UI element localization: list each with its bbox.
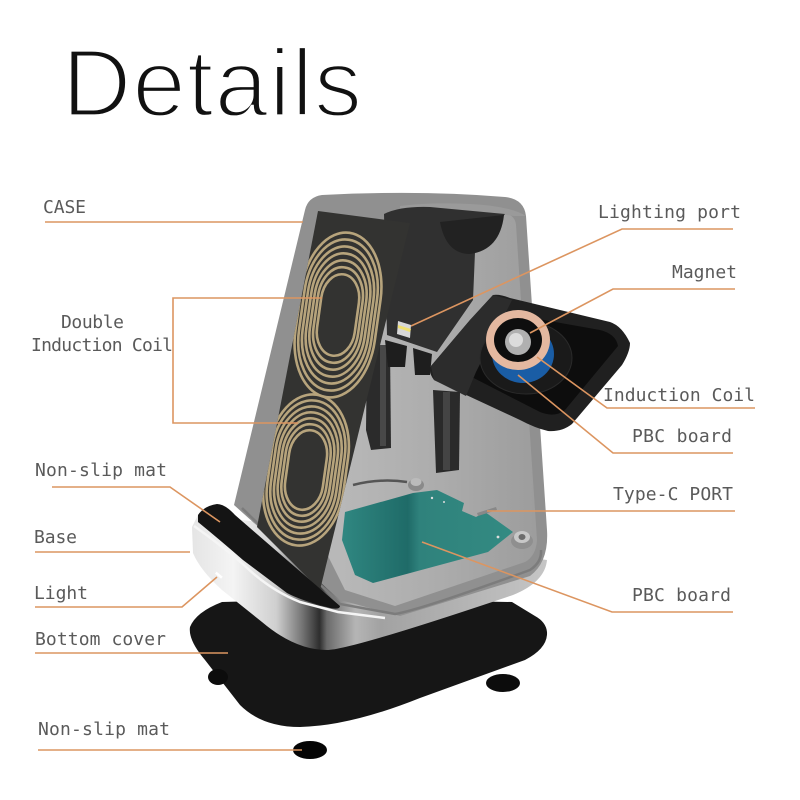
lightning connector [397,321,411,338]
copper ring [486,310,550,370]
lower coil [262,393,350,547]
silver magnet [505,329,531,355]
upper coil [293,231,383,399]
label: light: Light [34,583,88,604]
inner top bracket [384,207,505,352]
double coil plate [257,211,387,587]
non-slip foot left [208,669,228,685]
screw post right [511,531,533,549]
label: case: CASE [43,197,86,218]
label: pbc board lower: PBC board [632,585,731,606]
screw post rear [408,478,424,491]
magnetic charging module [430,295,630,431]
label: induction coil: Induction Coil [603,385,755,406]
light indicator [215,572,223,579]
label: pbc board upper: PBC board [632,426,732,447]
label: non-slip mat lower: Non-slip mat [38,719,170,740]
pcb board [342,490,513,583]
label: double induction coil: Induction Coil [31,335,173,356]
tray edge [242,508,541,614]
chrome base [192,515,547,650]
rear cable [353,481,407,485]
support columns [366,340,460,473]
bottom cover [190,600,547,727]
label: bottom cover: Bottom cover [35,629,166,650]
strip highlight [194,526,385,618]
non-slip foot right [486,674,520,692]
black non-slip strip [198,504,340,609]
label: non-slip mat upper: Non-slip mat [35,460,167,481]
leader lines [35,222,755,750]
label: double induction coil: Double [61,312,124,333]
non-slip foot bottom [293,741,327,759]
label: magnet: Magnet [672,262,737,283]
label: lighting port: Lighting port [598,202,741,223]
blue ring [492,325,554,383]
label: double induction coil [31,312,173,356]
label: base: Base [34,527,77,548]
label: type-c port: Type-C PORT [613,484,733,505]
base cup [480,322,572,394]
title: Details [62,30,362,137]
translucent case [234,193,547,616]
